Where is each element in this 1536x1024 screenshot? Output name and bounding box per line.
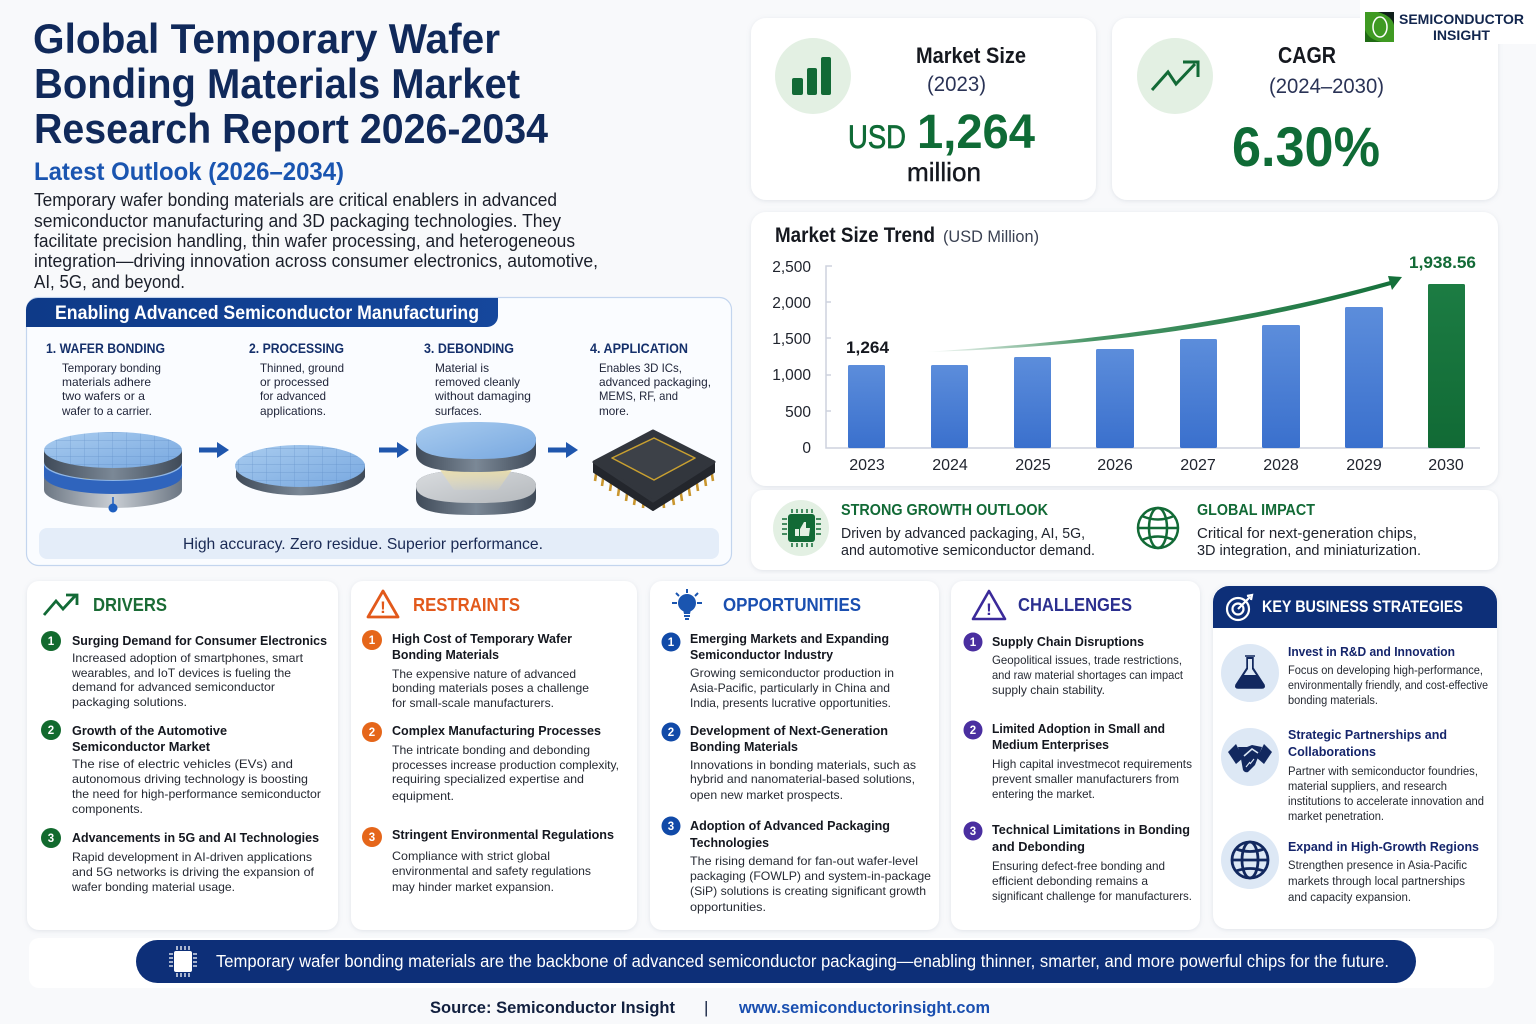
opportunity 3: Adoption of Advanced Packaging	[690, 818, 890, 833]
driver 1: 1	[48, 636, 55, 648]
challenge 3: Ensuring defect-free bonding and	[992, 859, 1165, 873]
drivers heading: DRIVERS	[93, 595, 167, 615]
chart title	[775, 224, 1039, 247]
driver 2: The rise of electric vehicles (EVs) and	[72, 757, 293, 771]
step 1 text	[46, 341, 165, 418]
source line: |	[704, 998, 708, 1017]
restraint 1: Bonding Materials	[392, 647, 499, 662]
chart title: (USD Million)	[943, 227, 1039, 246]
arrow: step 2 to 3	[379, 442, 409, 458]
challenge 3: Technical Limitations in Bonding	[992, 822, 1190, 837]
step 2 text: for advanced	[260, 389, 326, 403]
step 3 text	[424, 341, 531, 418]
y axis labels: 2,500	[772, 259, 811, 276]
step 1 text: 1. WAFER BONDING	[46, 341, 165, 356]
source line	[430, 998, 990, 1017]
step 2 text: 2. PROCESSING	[249, 341, 344, 356]
restraint 3: may hinder market expansion.	[392, 880, 554, 894]
panel: market size trend chart	[751, 212, 1498, 486]
x axis labels: 2030	[1428, 457, 1464, 474]
opportunity 3: opportunities.	[690, 900, 766, 914]
icon: trending up	[44, 595, 77, 615]
intro paragraph: AI, 5G, and beyond.	[34, 272, 185, 292]
growth outlook text	[841, 502, 1095, 559]
challenge 2: High capital investmecot requirements	[992, 757, 1192, 771]
opportunity 2: Bonding Materials	[690, 739, 798, 754]
panel header: Enabling Advanced Semiconductor Manufacturing	[55, 303, 479, 324]
opportunity 1: 1	[668, 637, 675, 649]
step 3 text: removed cleanly	[435, 375, 520, 389]
restraint 3: Stringent Environmental Regulations	[392, 827, 614, 842]
driver 2	[41, 720, 321, 816]
x axis labels	[849, 457, 1464, 474]
step 2 text	[249, 341, 344, 418]
driver 3: 3	[48, 833, 54, 845]
challenge 2: Limited Adoption in Small and	[992, 721, 1165, 736]
logo wordmark	[1399, 11, 1524, 43]
step 2 text: or processed	[260, 375, 329, 389]
challenge 1: Geopolitical issues, trade restrictions,	[992, 653, 1182, 667]
restraint 1: for small-scale manufacturers.	[392, 696, 554, 710]
strategy 1 text	[1288, 644, 1488, 707]
panel: challenges	[951, 581, 1200, 930]
strategy 1 icon: flask	[1221, 644, 1279, 702]
CAGR period: (2024–2030)	[1269, 75, 1384, 98]
x axis labels: 2023	[849, 457, 885, 474]
title: Research Report 2026-2034	[34, 105, 549, 152]
driver 1: wearables, and IoT devices is fueling the	[71, 666, 291, 680]
challenge 2: Medium Enterprises	[992, 737, 1109, 752]
illustration: thinned wafer	[235, 445, 365, 495]
CAGR value: 6.30%	[1232, 115, 1380, 178]
icon: warning triangle	[368, 591, 398, 617]
restraint 1: 1	[369, 635, 376, 647]
driver 2: Semiconductor Market	[72, 739, 211, 754]
challenge 2: 2	[970, 725, 976, 737]
market size label: Market Size	[916, 43, 1026, 68]
opportunity 1: Emerging Markets and Expanding	[690, 631, 889, 646]
strategy 2 text: Partner with semiconductor foundries,	[1288, 766, 1478, 778]
opportunity 3: The rising demand for fan-out wafer-level	[690, 854, 918, 868]
restraint 3	[362, 827, 614, 894]
step 3 text: Material is	[435, 361, 489, 375]
driver 2: Growth of the Automotive	[72, 723, 227, 738]
strategy 2 text: Strategic Partnerships and	[1288, 727, 1447, 742]
restraint 1: bonding materials poses a challenge	[392, 681, 589, 695]
opportunity 3: Technologies	[690, 835, 769, 850]
opportunity 2: Development of Next-Generation	[690, 723, 888, 738]
card: CAGR	[1112, 18, 1498, 200]
y axis labels: 2,000	[772, 295, 811, 312]
driver 3: Rapid development in AI-driven applications	[72, 850, 312, 864]
icon: light bulb	[672, 589, 702, 619]
step 1 text: wafer to a carrier.	[61, 404, 152, 418]
strategy 3 text: Strengthen presence in Asia-Pacific	[1288, 860, 1467, 872]
step 4 text: MEMS, RF, and	[599, 389, 678, 403]
challenge 2: prevent smaller manufacturers from	[992, 772, 1179, 786]
challenge 3	[964, 822, 1192, 903]
restraint 2: requiring specialized expertise and	[392, 772, 584, 786]
opportunity 1: Asia-Pacific, particularly in China and	[690, 681, 890, 695]
title: Global Temporary Wafer	[33, 15, 500, 62]
strategies header	[1213, 586, 1497, 628]
restraint 3: Compliance with strict global	[392, 849, 550, 863]
y axis labels: 500	[785, 404, 811, 421]
y axis labels	[772, 259, 811, 457]
challenge 1: supply chain stability.	[992, 683, 1105, 697]
restraint 1	[362, 630, 589, 710]
market size value	[848, 106, 1035, 159]
market size year: (2023)	[927, 73, 986, 96]
challenge 3: 3	[970, 826, 976, 838]
panel: outlook strip	[751, 490, 1498, 570]
logo	[1360, 0, 1536, 44]
driver 2: the need for high-performance semiconductor	[72, 787, 321, 801]
step 3 text: 3. DEBONDING	[424, 341, 514, 356]
opportunity 2: hybrid and nanomaterial-based solutions,	[690, 772, 915, 786]
restraint 2: processes increase production complexity,	[392, 758, 619, 772]
restraint 2: equipment.	[392, 789, 454, 803]
restraint 2: 2	[369, 727, 375, 739]
strategy 3 text: and capacity expansion.	[1288, 892, 1411, 904]
strategy 2 text	[1288, 727, 1484, 823]
y axis labels: 1,000	[772, 367, 811, 384]
challenge 2	[964, 720, 1192, 801]
icon: trend arrow	[1137, 38, 1213, 114]
step 1 text: Temporary bonding	[62, 361, 161, 375]
bottom banner	[29, 938, 1494, 988]
card: market size	[751, 18, 1096, 200]
challenge 3: and Debonding	[992, 839, 1085, 854]
challenge 1: Supply Chain Disruptions	[992, 634, 1144, 649]
panel: restraints	[351, 581, 637, 930]
challenges heading: CHALLENGES	[1018, 595, 1132, 615]
icon: alert triangle: !	[986, 600, 992, 619]
step 1 text: materials adhere	[62, 375, 151, 389]
restraint 2	[362, 722, 619, 803]
step 3 text: surfaces.	[435, 404, 482, 418]
strategy 3 text	[1288, 839, 1479, 904]
title	[33, 15, 549, 152]
opportunity 2: Innovations in bonding materials, such as	[690, 758, 916, 772]
market size value: 1,264	[917, 106, 1035, 159]
strategy 3 icon: globe	[1221, 831, 1279, 889]
step 2 text: applications.	[260, 404, 326, 418]
challenge 3: efficient debonding remains a	[992, 874, 1148, 888]
label: 2023 value: 1,264	[846, 338, 890, 357]
intro paragraph: integration—driving innovation across consumer electronics, automotive,	[34, 251, 598, 271]
challenge 1: and raw material shortages can impact	[992, 668, 1184, 682]
strategy 2 icon: handshake	[1221, 728, 1279, 786]
challenge 2: entering the market.	[992, 787, 1095, 801]
opportunity 1: Growing semiconductor production in	[690, 666, 894, 680]
source line: www.semiconductorinsight.com	[738, 998, 990, 1017]
x axis labels: 2025	[1015, 457, 1051, 474]
market size value: USD	[848, 119, 906, 155]
opportunities heading: OPPORTUNITIES	[723, 595, 861, 615]
opportunity 1: India, presents lucrative opportunities.	[690, 696, 891, 710]
x axis labels: 2029	[1346, 457, 1382, 474]
panel: key business strategies	[1213, 586, 1497, 929]
step 3 text: without damaging	[434, 389, 531, 403]
driver 2: components.	[72, 802, 143, 816]
opportunity 3: packaging (FOWLP) and system-in-package	[690, 869, 931, 883]
driver 1: demand for advanced semiconductor	[72, 680, 275, 694]
driver 1	[41, 631, 327, 709]
strategy 2 text: institutions to accelerate innovation and	[1288, 796, 1484, 808]
panel: opportunities	[650, 581, 939, 930]
growth outlook text: Driven by advanced packaging, AI, 5G,	[841, 526, 1085, 542]
strategy 3 text: Expand in High-Growth Regions	[1288, 839, 1479, 854]
strategy 1 text: bonding materials.	[1288, 695, 1378, 707]
strategy 1 text: Focus on developing high-performance,	[1288, 665, 1483, 677]
step 2 text: Thinned, ground	[260, 361, 344, 375]
arrow: step 1 to 2	[199, 442, 229, 458]
driver 1: Surging Demand for Consumer Electronics	[72, 633, 327, 648]
challenge 3: significant challenge for manufacturers.	[992, 889, 1192, 903]
banner message: Temporary wafer bonding materials are the backbone of advanced semiconductor packaging—enabling thinner, smarter, and more powerful chips for the future.	[216, 951, 1389, 971]
global impact text	[1197, 502, 1421, 559]
restraint 1: High Cost of Temporary Wafer	[392, 631, 572, 646]
icon: warning triangle: !	[380, 598, 386, 617]
arrow: growth trend	[925, 276, 1402, 352]
strategy 2 text: material suppliers, and research	[1288, 781, 1447, 793]
strategy 3 text: markets through local partnerships	[1288, 876, 1465, 888]
driver 2: autonomous driving technology is boosting	[72, 772, 308, 786]
illustration: debonding wafers	[416, 422, 536, 515]
market size unit: million	[907, 157, 981, 187]
strategy 1 text: Invest in R&D and Innovation	[1288, 644, 1455, 659]
driver 2: 2	[48, 725, 54, 737]
driver 3: Advancements in 5G and AI Technologies	[72, 830, 319, 845]
CAGR label: CAGR	[1278, 42, 1336, 68]
y axis labels: 0	[802, 440, 811, 457]
x axis labels: 2024	[932, 457, 968, 474]
icon: globe	[1138, 508, 1178, 548]
y axis labels: 1,500	[772, 331, 811, 348]
driver 1: Increased adoption of smartphones, smart	[72, 651, 304, 665]
tagline bar	[39, 528, 719, 559]
restraint 3: environmental and safety regulations	[392, 864, 591, 878]
illustration: packaged chip	[594, 431, 714, 510]
step 4 text	[590, 341, 711, 418]
icon: chip	[169, 946, 197, 977]
challenge 1	[964, 632, 1184, 697]
arrow: step 3 to 4	[548, 442, 578, 458]
global impact text: 3D integration, and miniaturization.	[1197, 543, 1421, 559]
step 4 text: Enables 3D ICs,	[599, 361, 682, 375]
panel: enabling advanced semiconductor manufacturing	[26, 298, 732, 566]
logo wordmark: SEMICONDUCTOR	[1399, 11, 1524, 27]
global impact text: Critical for next-generation chips,	[1197, 526, 1417, 542]
strategies header: KEY BUSINESS STRATEGIES	[1262, 598, 1463, 616]
subtitle: latest outlook: Latest Outlook (2026–2034)	[34, 158, 344, 186]
intro paragraph: facilitate precision handling, thin wafer processing, and heterogeneous	[34, 231, 575, 251]
bars	[848, 284, 1465, 448]
source line: Source: Semiconductor Insight	[430, 998, 675, 1017]
step 4 text: advanced packaging,	[599, 375, 711, 389]
panel header	[26, 298, 498, 327]
opportunity 2: open new market prospects.	[690, 788, 843, 802]
driver 3: and 5G networks is driving the expansion of	[72, 865, 315, 879]
x axis labels: 2026	[1097, 457, 1133, 474]
icon: chip with thumb	[773, 500, 829, 556]
icon: target	[1227, 595, 1252, 620]
strategy 1 text: environmentally friendly, and cost-effective	[1288, 680, 1488, 692]
step 1 text: two wafers or a	[62, 389, 145, 403]
restraints heading: RESTRAINTS	[413, 595, 520, 615]
opportunity 1	[662, 631, 894, 710]
intro paragraph	[34, 190, 598, 292]
challenge 1: 1	[970, 637, 977, 649]
chart title: Market Size Trend	[775, 224, 935, 247]
opportunity 3	[662, 816, 931, 914]
driver 3: wafer bonding material usage.	[71, 880, 235, 894]
opportunity 1: Semiconductor Industry	[690, 647, 834, 662]
restraint 1: The expensive nature of advanced	[392, 667, 576, 681]
icon: logo mark	[1365, 12, 1394, 42]
icon: bar chart	[775, 38, 851, 114]
strategy 2 text: Collaborations	[1288, 744, 1376, 759]
opportunity 3: 3	[668, 821, 674, 833]
driver 1: packaging solutions.	[72, 695, 187, 709]
illustration: bonded wafer stack	[44, 432, 182, 512]
x axis labels: 2027	[1180, 457, 1216, 474]
step 4 text: more.	[599, 404, 629, 418]
growth outlook text: STRONG GROWTH OUTLOOK	[841, 502, 1049, 519]
step 4 text: 4. APPLICATION	[590, 341, 688, 356]
growth outlook text: and automotive semiconductor demand.	[841, 543, 1095, 559]
restraint 2: The intricate bonding and debonding	[392, 743, 590, 757]
tagline bar: High accuracy. Zero residue. Superior performance.	[183, 536, 543, 553]
intro paragraph: semiconductor manufacturing and 3D packaging technologies. They	[34, 211, 561, 231]
strategy 2 text: market penetration.	[1288, 811, 1384, 823]
restraint 3: 3	[369, 832, 375, 844]
logo wordmark: INSIGHT	[1433, 27, 1490, 43]
title: Bonding Materials Market	[34, 60, 520, 107]
opportunity 2: 2	[668, 727, 674, 739]
global impact text: GLOBAL IMPACT	[1197, 502, 1315, 519]
label: end value: 1,938.56	[1409, 253, 1476, 272]
x axis labels: 2028	[1263, 457, 1299, 474]
opportunity 3: (SiP) solutions is creating significant growth	[690, 884, 926, 898]
opportunity 2	[662, 722, 916, 802]
panel: drivers	[27, 581, 338, 930]
icon: alert triangle	[973, 591, 1005, 619]
driver 3	[41, 828, 319, 894]
intro paragraph: Temporary wafer bonding materials are critical enablers in advanced	[34, 190, 557, 210]
restraint 2: Complex Manufacturing Processes	[392, 723, 601, 738]
